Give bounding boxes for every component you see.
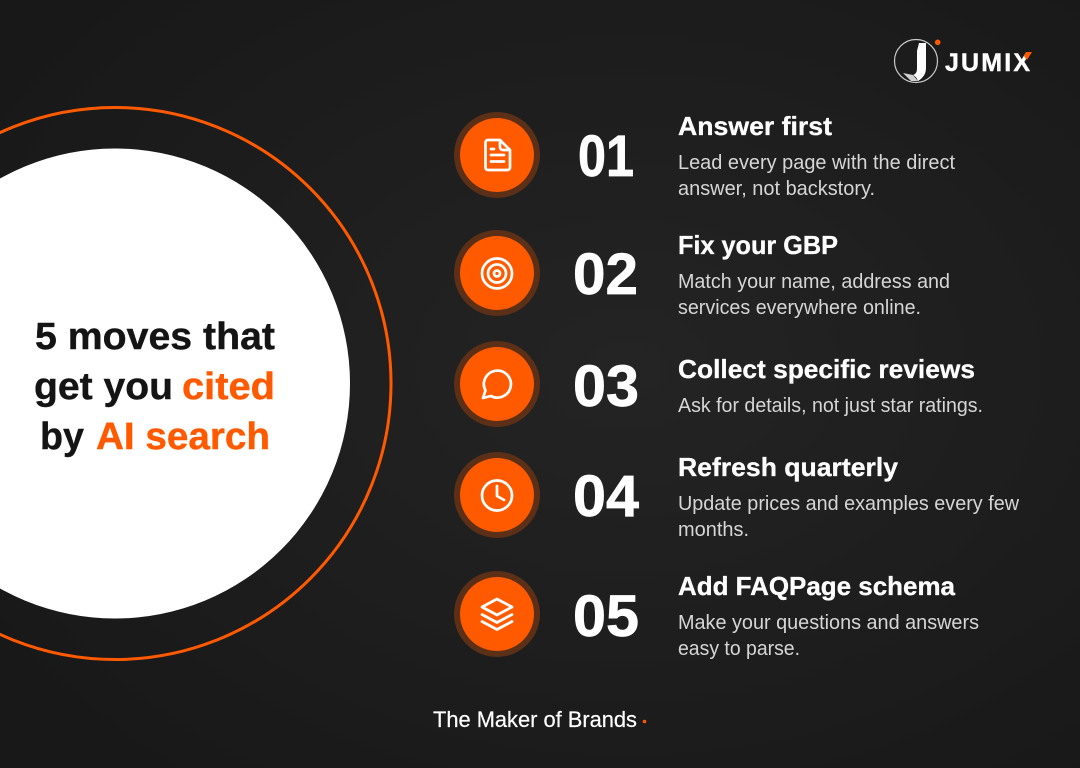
item 02: fix your GBP xyxy=(454,230,950,319)
icon: clock xyxy=(454,452,540,538)
description: Update prices and examples every few xyxy=(678,492,1019,515)
description: Make your questions and answers xyxy=(678,611,979,634)
description: services everywhere online. xyxy=(678,296,921,319)
icon: document xyxy=(454,112,540,198)
description xyxy=(678,492,1019,541)
logo: JUMIX: JUMIX xyxy=(945,49,1030,77)
title: 5 moves that xyxy=(35,316,275,358)
title: get you xyxy=(34,366,173,408)
icon: target xyxy=(454,230,540,316)
heading: Add FAQPage schema xyxy=(678,571,956,601)
description: answer, not backstory. xyxy=(678,177,875,200)
title: AI search xyxy=(96,416,270,458)
description xyxy=(678,270,950,319)
number 01: 01 xyxy=(578,124,634,189)
item 03: collect specific reviews xyxy=(454,341,983,427)
description xyxy=(678,151,955,200)
logo: JUMIX xyxy=(894,40,1032,82)
number 02: 02 xyxy=(573,242,638,307)
icon: layers xyxy=(454,571,540,657)
white disc xyxy=(0,148,350,618)
panel: title circle xyxy=(0,108,391,660)
title xyxy=(34,316,275,458)
title: by xyxy=(40,416,84,458)
heading: Fix your GBP xyxy=(678,230,838,260)
description: Lead every page with the direct xyxy=(678,151,955,174)
number 04: 04 xyxy=(573,464,639,529)
heading: Collect specific reviews xyxy=(678,354,975,384)
item 05: add FAQPage schema xyxy=(454,571,979,660)
description: Ask for details, not just star ratings. xyxy=(678,394,983,417)
title: cited xyxy=(182,366,275,408)
description: easy to parse. xyxy=(678,637,800,660)
number 03: 03 xyxy=(573,354,639,419)
heading: Answer first xyxy=(678,111,832,141)
icon: speech bubble xyxy=(454,341,540,427)
item 01: answer first xyxy=(454,111,955,200)
orange outer ring xyxy=(0,108,391,660)
description: Match your name, address and xyxy=(678,270,950,293)
description xyxy=(678,611,979,660)
heading: Refresh quarterly xyxy=(678,452,899,482)
item 04: refresh quarterly xyxy=(454,452,1019,541)
description: months. xyxy=(678,518,749,541)
number 05: 05 xyxy=(573,584,639,649)
footer tagline: The Maker of Brands xyxy=(433,707,637,732)
